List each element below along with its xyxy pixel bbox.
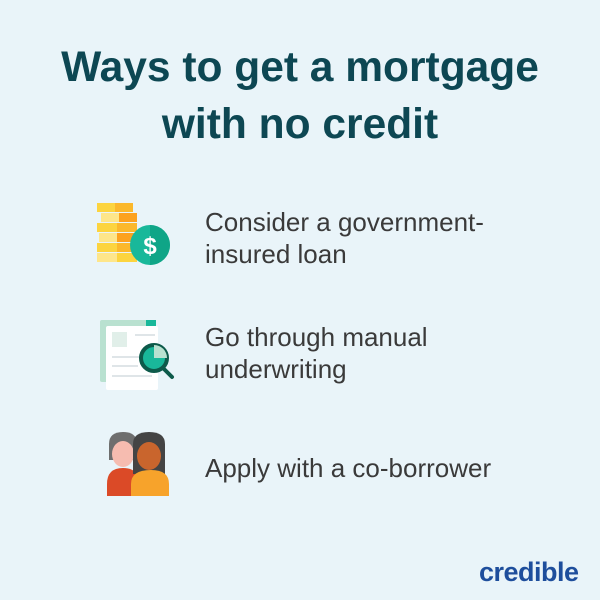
icon: coins: $ [143, 233, 157, 260]
logo: credible: credible [479, 557, 579, 587]
title: Ways to get a mortgage [61, 44, 539, 91]
text: government loan: Consider a government- [205, 207, 484, 237]
text: manual underwriting: Go through manual [205, 322, 428, 352]
text: co-borrower: Apply with a co-borrower [205, 453, 491, 483]
text: manual underwriting: underwriting [205, 354, 347, 384]
icon: coins [97, 203, 170, 265]
text: government loan: insured loan [205, 239, 347, 269]
title [61, 44, 539, 148]
text: manual underwriting [205, 322, 428, 384]
icon: document with magnifier [100, 320, 174, 390]
text: government loan [205, 207, 484, 269]
icon: two people [107, 432, 169, 496]
title: with no credit [162, 101, 438, 148]
